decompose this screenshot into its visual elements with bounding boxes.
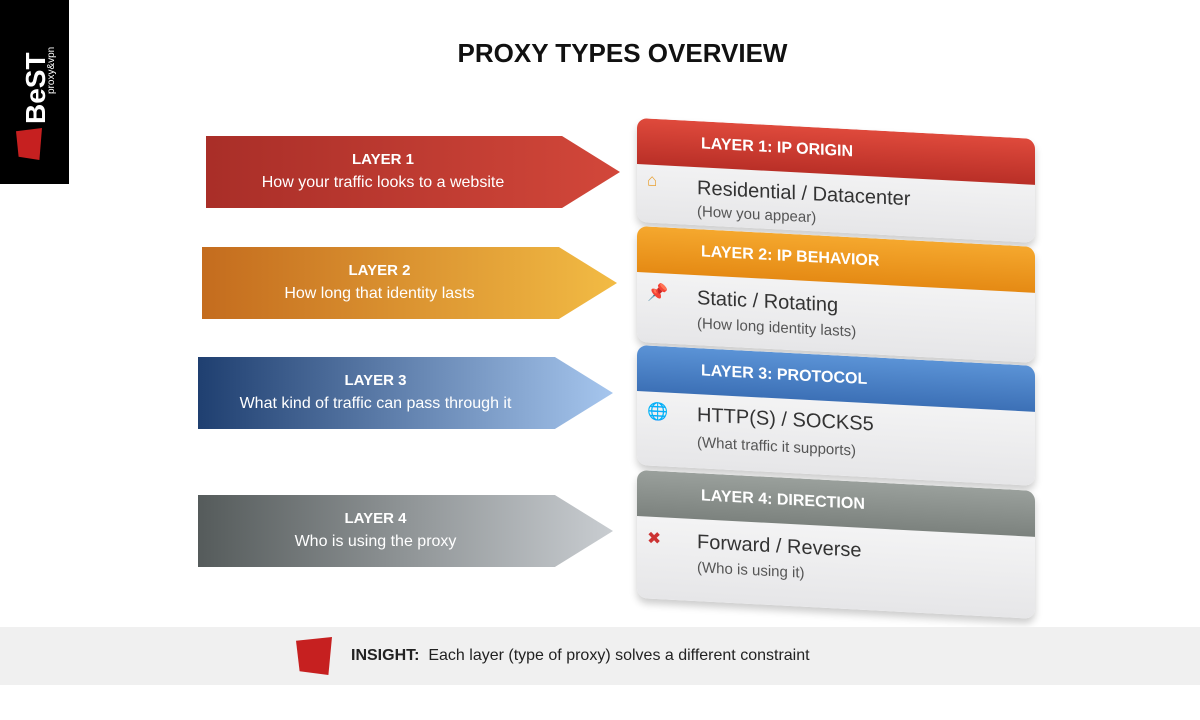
arrow: layer 1: LAYER 1 [352,151,414,168]
block: layer 4 [637,470,1035,619]
logo [0,0,69,184]
arrow: layer 4: Who is using the proxy [295,533,456,550]
block: layer 2: 📌 [647,283,668,303]
block: layer 3: LAYER 3: PROTOCOL [701,362,867,388]
block: layer 4: Forward / Reverse [697,531,862,562]
block: layer 1: LAYER 1: IP ORIGIN [701,135,853,160]
arrow: layer 3: What kind of traffic can pass through it [240,395,511,412]
insight bar [0,627,1200,685]
block: layer 1: Residential / Datacenter [697,177,910,210]
block: layer 1: (How you appear) [697,203,816,226]
block: layer 2: Static / Rotating [697,287,838,317]
block: layer 3: 🌐 [647,402,668,422]
block: layer 3: (What traffic it supports) [697,434,856,459]
title: PROXY TYPES OVERVIEW [458,38,787,68]
arrow: layer 4 [198,495,613,567]
logo: proxy&vpn [46,47,57,94]
block: layer 3 [637,345,1035,486]
block: layer 2 [637,226,1035,363]
block: layer 4: ✖ [647,529,661,548]
arrow: layer 2 [202,247,617,319]
arrow: layer 1: How your traffic looks to a website [262,174,504,191]
arrow: layer 2: LAYER 2 [348,262,410,279]
insight text: INSIGHT: Each layer (type of proxy) solves a different constraint [351,647,810,664]
block: layer 1 [637,118,1035,243]
arrow: layer 4: LAYER 4 [344,510,406,527]
block: layer 2: (How long identity lasts) [697,315,856,340]
block: layer 4: (Who is using it) [697,559,805,582]
arrow: layer 3: LAYER 3 [344,372,406,389]
block: layer 1: ⌂ [647,171,657,190]
icon: logo mark [296,637,332,675]
arrow: layer 1 [206,136,620,208]
block: layer 3: HTTP(S) / SOCKS5 [697,404,874,435]
arrow: layer 3 [198,357,613,429]
logo: BeST [20,52,51,124]
arrow: layer 2: How long that identity lasts [284,285,475,302]
block: layer 4: LAYER 4: DIRECTION [701,487,865,513]
block: layer 2: LAYER 2: IP BEHAVIOR [701,243,879,270]
